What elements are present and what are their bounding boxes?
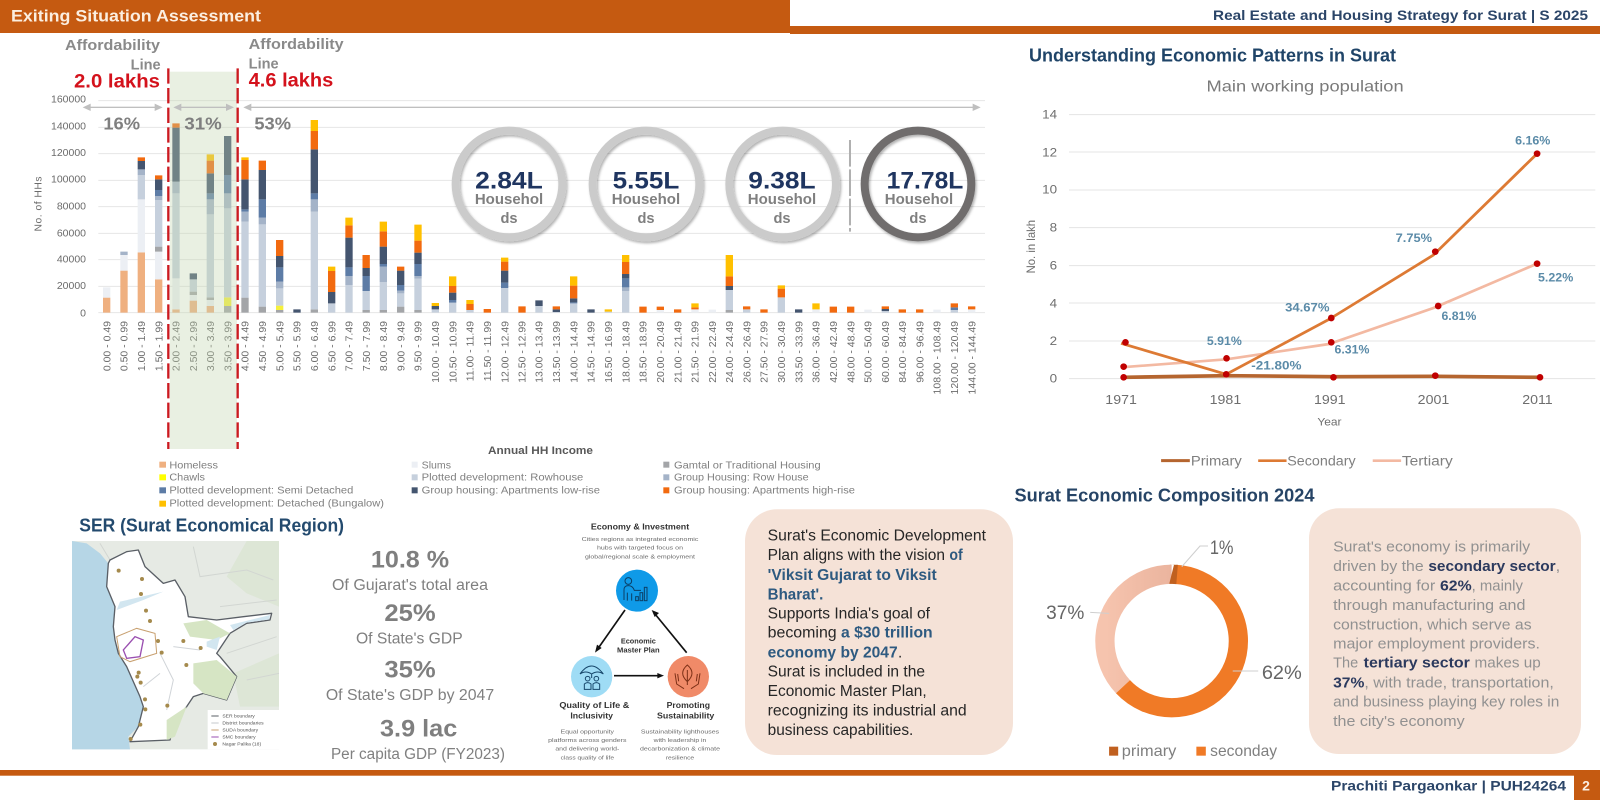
panel: economy summary: 62%: [1440, 578, 1472, 594]
range arrows: [83, 104, 981, 111]
heading: SER: SER (Surat Economical Region): [79, 516, 344, 536]
panel: economy summary: ,: [1556, 559, 1560, 575]
series markers: [1120, 150, 1543, 381]
panel: economic development plan: recognizing its industrial and: [768, 703, 967, 720]
key statistics: 25%: [384, 600, 436, 627]
line chart legend: Tertiary: [1402, 454, 1453, 469]
x axis labels: 1.00 - 1.49: [137, 321, 148, 371]
panel: economy summary: , with trade, transportation,: [1364, 675, 1554, 691]
x axis labels: 7.00 - 7.49: [345, 321, 356, 371]
y axis labels: 80000: [57, 201, 86, 212]
x axis labels: [102, 321, 978, 394]
y axis labels: 100000: [51, 175, 86, 186]
bar chart legend: Homeless: [169, 460, 218, 471]
x axis labels: 9.00 - 9.49: [396, 321, 407, 371]
x axis labels: 50.00 - 50.49: [864, 321, 875, 383]
household circle 3: Househol: [748, 192, 816, 208]
panel: economy summary: driven by the: [1333, 559, 1424, 575]
x axis labels: 24.00 - 24.49: [725, 321, 736, 383]
axis labels: 1991: [1314, 393, 1346, 407]
y axis labels: 120000: [51, 148, 86, 159]
diagram: economic master plan: hubs with targeted focus on: [597, 546, 683, 552]
panel: economy summary: secondary sector: [1428, 559, 1556, 575]
axis labels: 1971: [1105, 393, 1137, 407]
y axis labels: [51, 94, 86, 319]
x axis labels: 10.00 - 10.49: [431, 321, 442, 383]
title: Exiting Situation Assessment: [11, 6, 261, 26]
panel: economy summary: and business playing key roles in: [1333, 694, 1559, 710]
household circle total: ds: [909, 211, 927, 227]
data labels: 7.75%: [1396, 231, 1433, 245]
bar chart legend: Plotted development: Semi Detached: [169, 485, 354, 496]
icon: hands with leaf: [668, 656, 709, 697]
dashed affordability lines: [168, 68, 238, 449]
affordability labels: 2.0 lakhs: [74, 71, 160, 92]
panel: economy summary: the city's economy: [1333, 714, 1465, 730]
y axis labels: 140000: [51, 122, 86, 133]
diagram: economic master plan: Sustainability: [657, 712, 715, 721]
map legend: Nagar Palika (18): [222, 741, 261, 747]
key statistics: [326, 547, 505, 763]
x axis labels: 11.00 - 11.49: [466, 321, 477, 381]
bar chart legend: Chawls: [169, 473, 205, 484]
panel: economy summary: 37%: [1333, 675, 1364, 691]
panel: economy summary: The: [1333, 655, 1358, 671]
x axis labels: 5.00 - 5.49: [275, 321, 286, 371]
x axis labels: 22.00 - 22.49: [708, 321, 719, 383]
panel: economic development plan: of: [949, 547, 963, 564]
household circle 1: 2.84L: [475, 167, 543, 194]
diagram: economic master plan: platforms across genders: [548, 738, 627, 744]
x axis labels: 0.50 - 0.99: [120, 321, 131, 371]
bar chart legend: Group Housing: Row House: [674, 472, 809, 483]
bar chart legend: Group housing: Apartments high-rise: [674, 485, 855, 496]
map: Surat Economical Region: [72, 541, 279, 749]
panel: economic development plan: .: [898, 644, 902, 661]
x axis labels: 8.00 - 8.49: [379, 321, 390, 371]
x axis labels: 14.50 - 14.99: [587, 321, 598, 383]
key statistics: 10.8 %: [371, 547, 449, 574]
bar chart legend: Slums: [422, 460, 451, 471]
x axis labels: 1.50 - 1.99: [154, 321, 165, 371]
household circle 2: Househol: [612, 192, 680, 208]
household circle 2: 5.55L: [613, 167, 679, 194]
x axis labels: 14.00 - 14.49: [569, 321, 580, 383]
label: promoting sustainability: Promoting: [667, 701, 710, 710]
x axis labels: 16.50 - 16.99: [604, 321, 615, 383]
diagram: economic master plan: and delivering world-: [555, 747, 619, 753]
axis labels: 0: [1050, 371, 1057, 386]
x axis labels: 84.00 - 84.49: [898, 321, 909, 383]
x axis labels: 10.50 - 10.99: [448, 321, 459, 383]
donut chart: economic composition: [1046, 538, 1302, 760]
data labels: 6.81%: [1441, 309, 1477, 323]
icon: person with bars: [616, 570, 658, 612]
diagram: economic master plan: with leadership in: [652, 738, 706, 744]
map legend: [208, 710, 279, 749]
x axis labels: 33.50 - 33.99: [794, 321, 805, 383]
key statistics: Of State's GDP by 2047: [326, 687, 494, 704]
x axis labels: 42.00 - 42.49: [829, 321, 840, 383]
panel: economy summary: Surat's economy is primarily: [1333, 539, 1530, 555]
x axis labels: 144.00 - 144.49: [967, 321, 978, 394]
y axis title: No. of HHs: [33, 176, 44, 231]
arrows: [595, 610, 687, 678]
axis labels: [1023, 107, 1553, 429]
x axis labels: 12.50 - 12.99: [518, 321, 529, 383]
donut labels: [1090, 546, 1258, 671]
range percentages: [103, 113, 291, 133]
panel: economy summary: through manufacturing and: [1333, 598, 1525, 614]
panel: economy summary: makes up: [1475, 655, 1541, 671]
household circle 2: [593, 131, 699, 237]
x axis labels: 3.00 - 3.49: [206, 321, 217, 371]
stacked bar chart: households by income: [33, 37, 985, 449]
diagram: economic master plan: resilience: [666, 755, 694, 761]
key statistics: 3.9 lac: [380, 716, 457, 743]
axis labels: 4: [1050, 296, 1057, 310]
bar chart legend: Plotted development: Detached (Bungalow): [169, 499, 384, 510]
x axis labels: 26.00 - 26.49: [742, 321, 753, 383]
key statistics: Of Gujarat's total area: [332, 577, 488, 594]
page number: 2: [1582, 778, 1590, 794]
axis labels: 2: [1050, 334, 1057, 348]
donut legend: seconday: [1210, 743, 1277, 760]
line chart legend: Primary: [1191, 454, 1242, 469]
x axis labels: 2.50 - 2.99: [189, 321, 200, 371]
range percentages: 31%: [184, 113, 222, 133]
panel: economy summary: tertiary sector: [1364, 655, 1470, 671]
key statistics: Per capita GDP (FY2023): [331, 746, 505, 763]
panel: economy summary: construction, which serve as: [1333, 617, 1532, 633]
household circle 1: [456, 131, 562, 237]
axis labels: 2001: [1418, 393, 1449, 407]
bar chart legend: Group housing: Apartments low-rise: [422, 485, 600, 496]
data labels: [1207, 133, 1574, 372]
household circle 3: [729, 131, 836, 237]
x axis labels: 108.00 - 108.49: [933, 321, 944, 394]
axis labels: 14: [1042, 107, 1057, 121]
range percentages: 53%: [254, 113, 291, 133]
affordability labels: [65, 37, 345, 92]
bar chart x axis title: Annual HH Income: [488, 445, 593, 457]
x axis labels: 120.00 - 120.49: [950, 321, 961, 394]
x axis labels: 18.00 - 18.49: [621, 321, 632, 383]
affordability labels: Affordability: [249, 37, 345, 53]
household circle total: [865, 131, 971, 237]
household circle 3: ds: [773, 211, 791, 227]
affordability labels: Line: [131, 57, 161, 73]
series lines: [1121, 154, 1540, 377]
x axis labels: 7.50 - 7.99: [362, 321, 373, 371]
map legend: District boundaries: [222, 720, 264, 726]
bar chart legend: Gamtal or Traditional Housing: [674, 460, 821, 471]
donut chart: economic composition: 1%: [1210, 538, 1233, 559]
diagram: economic master plan: decarbonization & climate: [640, 747, 720, 753]
x axis labels: 0.00 - 0.49: [102, 321, 113, 371]
data labels: 5.91%: [1207, 334, 1242, 348]
panel: economic development plan: Supports India's goal of: [768, 605, 931, 622]
key statistics: Of State's GDP: [356, 630, 463, 647]
chart title: Main working population: [1207, 77, 1404, 95]
icon: umbrella with people: [571, 656, 612, 697]
header bar: [0, 0, 1600, 34]
panel: economy summary: , mainly: [1472, 578, 1523, 594]
label: quality of life: Quality of Life &: [559, 701, 630, 710]
heading: economic composition: Surat Economic Composition 2024: [1014, 486, 1314, 506]
diagram: economic master plan: Inclusivity: [570, 712, 614, 721]
green affordable band: [170, 72, 237, 449]
panel: economic development plan: Surat's Economic Development: [768, 528, 987, 545]
x axis labels: 13.00 - 13.49: [535, 321, 546, 383]
range percentages: 16%: [103, 113, 140, 133]
y axis labels: 160000: [51, 94, 86, 105]
line chart: main working population: [1023, 77, 1595, 469]
x axis labels: 4.50 - 4.99: [258, 321, 269, 371]
x axis labels: 20.00 - 20.49: [656, 321, 667, 383]
x axis labels: 5.50 - 5.99: [293, 321, 304, 371]
axis labels: No. in lakh: [1023, 220, 1038, 273]
affordability labels: 4.6 lakhs: [249, 71, 333, 92]
map legend: SER boundary: [222, 713, 255, 719]
household circle total: 17.78L: [887, 167, 963, 194]
panel: economic development plan: Bharat'.: [768, 586, 823, 603]
household circle total: Househol: [885, 192, 953, 208]
bar chart legend: Plotted development: Rowhouse: [422, 472, 584, 483]
data labels: 6.16%: [1515, 133, 1551, 147]
axis labels: 2011: [1522, 393, 1553, 407]
diagram: economic master plan: class quality of life: [561, 755, 614, 761]
donut chart: economic composition: 37%: [1046, 603, 1084, 624]
bar chart legend: [159, 460, 855, 510]
panel: economic development plan: Plan aligns with the vision: [768, 547, 945, 564]
household circle 1: Househol: [475, 192, 543, 208]
x axis labels: 6.50 - 6.99: [327, 321, 338, 371]
y axis labels: 40000: [57, 255, 86, 266]
panel: economy summary: [1309, 508, 1581, 754]
axis labels: 8: [1050, 220, 1057, 235]
line chart legend: Secondary: [1287, 454, 1356, 469]
panel: economic development plan: becoming: [768, 625, 837, 642]
diagram: economic master plan: [548, 522, 720, 761]
donut legend: primary: [1122, 743, 1176, 760]
panel: economy summary: accounting for: [1333, 578, 1435, 594]
diagram: economic master plan: Sustainability lighthouses: [641, 729, 719, 735]
x axis labels: 36.00 - 36.49: [812, 321, 823, 383]
panel: economic development plan: 'Viksit Gujarat to Viksit: [768, 567, 937, 584]
axis labels: 1981: [1210, 393, 1241, 407]
heading: economic patterns: Understanding Economic Patterns in Surat: [1029, 46, 1396, 66]
bar series: [107, 120, 972, 313]
panel: economic development plan: Economic Master Plan,: [768, 683, 927, 700]
key statistics: 35%: [384, 656, 436, 683]
x axis labels: 96.00 - 96.49: [915, 321, 926, 383]
x axis labels: 18.50 - 18.99: [639, 321, 650, 383]
x axis labels: 6.00 - 6.49: [310, 321, 321, 371]
axis labels: 12: [1042, 145, 1057, 159]
x axis labels: 60.00 - 60.49: [881, 321, 892, 383]
x axis labels: 9.50 - 9.99: [414, 321, 425, 371]
panel: economic development plan: Surat is included in the: [768, 664, 925, 681]
panel: economic development plan: economy by 2047: [768, 644, 898, 661]
project name: Real Estate and Housing Strategy for Surat | S 2025: [1213, 7, 1588, 23]
panel: economic development plan: business capabilities.: [768, 722, 913, 739]
y axis labels: 60000: [57, 228, 86, 239]
panel: economy summary: major employment providers.: [1333, 636, 1540, 652]
footer: [0, 770, 1600, 800]
y axis labels: 0: [80, 308, 86, 319]
map legend: SUDA boundary: [222, 727, 259, 733]
household circle 1: ds: [500, 211, 518, 227]
heading: economy and investment: Economy & Investment: [591, 522, 690, 531]
centre label: Economic: [621, 638, 656, 645]
household circle 3: 9.38L: [748, 167, 816, 194]
line chart legend: [1161, 454, 1453, 469]
x axis labels: 21.50 - 21.99: [691, 321, 702, 383]
panel: economic development plan: a $30 trillion: [841, 625, 933, 642]
affordability labels: Affordability: [65, 38, 161, 54]
affordability labels: Line: [249, 56, 279, 72]
axis labels: 6: [1050, 258, 1057, 272]
donut chart: economic composition: 62%: [1262, 663, 1302, 684]
x axis labels: 13.50 - 13.99: [552, 321, 563, 383]
author: Prachiti Pargaonkar | PUH24264: [1331, 778, 1566, 794]
diagram: economic master plan: Cities regions as integrated economic: [582, 537, 698, 543]
household circle 2: ds: [637, 211, 655, 227]
x axis labels: 2.00 - 2.49: [172, 321, 183, 371]
panel: economic development plan: [745, 509, 1013, 755]
divider: [847, 140, 853, 232]
x axis labels: 4.00 - 4.49: [241, 321, 252, 371]
data labels: 34.67%: [1285, 300, 1330, 315]
donut legend: [1109, 743, 1277, 760]
data labels: 5.22%: [1538, 270, 1574, 285]
x axis labels: 48.00 - 48.49: [846, 321, 857, 383]
diagram: economic master plan: global/regional scale & employment: [585, 554, 695, 560]
x axis labels: 12.00 - 12.49: [500, 321, 511, 383]
x axis labels: 27.50 - 27.99: [760, 321, 771, 383]
x axis labels: 11.50 - 11.99: [483, 321, 494, 381]
diagram: economic master plan: Equal opportunity: [561, 729, 614, 735]
x axis labels: 3.50 - 3.99: [223, 321, 234, 371]
data labels: 6.31%: [1335, 342, 1370, 356]
y axis labels: 20000: [57, 281, 86, 292]
map legend: SMC boundary: [222, 734, 256, 740]
data labels: -21.80%: [1251, 358, 1302, 372]
x axis labels: 21.00 - 21.49: [673, 321, 684, 383]
axis labels: 10: [1042, 182, 1057, 197]
axis labels: Year: [1317, 417, 1342, 429]
diagram: economic master plan: Master Plan: [617, 648, 660, 655]
x axis labels: 30.00 - 30.49: [777, 321, 788, 383]
